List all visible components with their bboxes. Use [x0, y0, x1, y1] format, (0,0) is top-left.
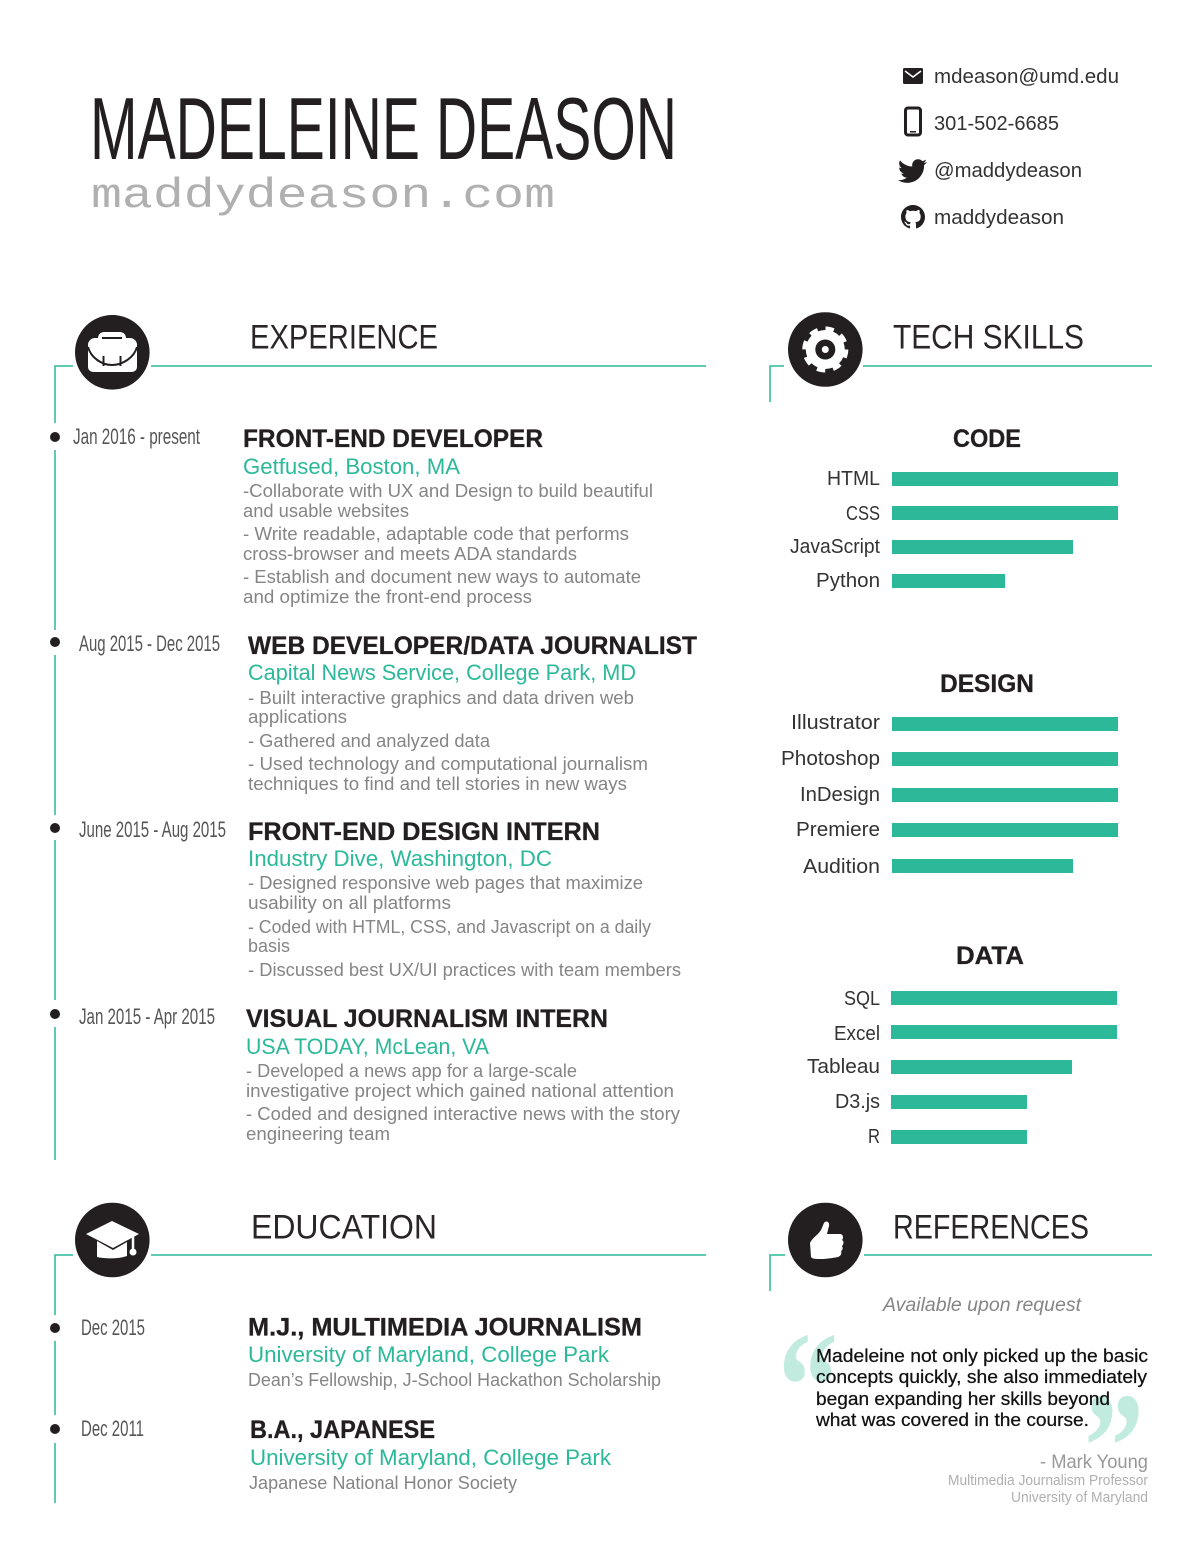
job: web developer/data journalist — [79, 631, 697, 794]
job: front-end developer: and optimize the front-end process — [243, 586, 532, 607]
testimonial quote: began expanding her skills beyond — [816, 1388, 1110, 1409]
bar chart: design: InDesign — [800, 784, 880, 806]
job: visual journalism intern: VISUAL JOURNALISM INTERN — [246, 1005, 608, 1033]
heading: experience: EXPERIENCE — [250, 318, 438, 356]
github handle: maddydeason — [934, 207, 1064, 229]
icon: github — [901, 205, 925, 228]
job: front-end developer: - Write readable, adaptable code that performs — [243, 523, 629, 544]
bar chart: data: Excel — [834, 1023, 880, 1045]
testimonial quote — [815, 1345, 1148, 1430]
attribution: University of Maryland — [1011, 1490, 1148, 1506]
bar chart: code — [790, 425, 1118, 592]
bar chart: design: Premiere — [796, 819, 880, 841]
website: maddydeason.com — [91, 172, 555, 220]
job: front-end developer: -Collaborate with UX and Design to build beautiful — [243, 480, 653, 501]
panel: tech skills — [770, 312, 1152, 1148]
job: web developer/data journalist: applications — [248, 706, 347, 727]
twitter handle: @maddydeason — [934, 160, 1082, 182]
heading: tech skills: TECH SKILLS — [893, 318, 1084, 356]
job: front-end developer: Getfused, Boston, MA — [243, 454, 460, 479]
attribution — [948, 1451, 1148, 1506]
bar chart: code: HTML — [827, 468, 880, 490]
degree: B.A. — [81, 1416, 612, 1493]
job: front-end design intern: usability on all platforms — [248, 892, 451, 913]
icon: mail — [903, 68, 923, 84]
job: web developer/data journalist: - Used technology and computational journalism — [248, 753, 648, 774]
bar chart: design — [781, 670, 1118, 878]
icon: graduation cap — [75, 1203, 150, 1277]
bar chart: code: CSS — [846, 503, 880, 525]
icon: phone — [906, 108, 920, 135]
title: name: MADELEINE DEASON — [90, 79, 677, 178]
bar chart: data: DATA — [956, 942, 1024, 970]
bar chart: design: Audition — [803, 856, 880, 878]
job: visual journalism intern: Jan 2015 - Apr 2015 — [79, 1004, 215, 1029]
contact list — [898, 66, 1119, 229]
panel: references — [770, 1203, 1152, 1533]
bar chart: design: DESIGN — [940, 670, 1034, 698]
bar chart: data — [807, 942, 1117, 1148]
bar chart: data: R — [868, 1126, 880, 1148]
job: web developer/data journalist: Aug 2015 - Dec 2015 — [79, 631, 220, 656]
job: web developer/data journalist: - Built interactive graphics and data driven web — [248, 687, 634, 708]
job: front-end design intern: June 2015 - Aug 2015 — [79, 817, 226, 842]
testimonial quote: what was covered in the course. — [815, 1409, 1089, 1430]
icon: gear — [788, 312, 863, 387]
job: front-end design intern: Industry Dive, Washington, DC — [248, 846, 552, 871]
note: available upon request: Available upon request — [882, 1294, 1083, 1316]
degree: M.J.: Dean’s Fellowship, J-School Hackathon Scholarship — [248, 1369, 661, 1390]
timeline dots — [50, 432, 60, 1019]
degree: B.A.: B.A., JAPANESE — [250, 1416, 435, 1444]
job: visual journalism intern — [79, 1004, 681, 1144]
job: visual journalism intern: investigative project which gained national attention — [246, 1080, 674, 1101]
degree: M.J. — [81, 1314, 661, 1390]
job: front-end developer: Jan 2016 - present — [73, 424, 200, 449]
job: front-end developer: and usable websites — [243, 500, 409, 521]
decorative quote close: ” — [1084, 1361, 1144, 1533]
job: visual journalism intern: - Developed a news app for a large-scale — [246, 1060, 577, 1081]
degree: B.A.: Dec 2011 — [81, 1416, 144, 1441]
icon: briefcase — [75, 315, 150, 390]
attribution: Multimedia Journalism Professor — [948, 1473, 1148, 1489]
job: front-end developer — [73, 424, 653, 607]
bar chart: data: D3.js — [835, 1091, 880, 1113]
panel: education — [50, 1203, 706, 1503]
phone number: 301-502-6685 — [934, 113, 1059, 135]
job: front-end design intern: - Designed responsive web pages that maximize — [248, 872, 643, 893]
header: name and website — [90, 79, 677, 220]
job: front-end design intern — [79, 817, 681, 980]
email: mdeason@umd.edu — [934, 66, 1119, 88]
heading: references: REFERENCES — [893, 1208, 1089, 1246]
job: web developer/data journalist: techniques to find and tell stories in new ways — [248, 773, 627, 794]
icon: thumbs up — [788, 1203, 863, 1277]
job: front-end design intern: basis — [248, 935, 290, 956]
job: front-end developer: - Establish and document new ways to automate — [243, 566, 641, 587]
decorative quote open: “ — [778, 1300, 838, 1472]
panel: experience — [50, 315, 706, 1160]
job: visual journalism intern: - Coded and designed interactive news with the story — [246, 1103, 681, 1124]
bar chart: code: CODE — [953, 425, 1021, 453]
timeline dots — [50, 1323, 60, 1434]
job: front-end developer: cross-browser and meets ADA standards — [243, 543, 577, 564]
degree: M.J.: University of Maryland, College Park — [248, 1342, 610, 1367]
job: visual journalism intern: USA TODAY, McLean, VA — [246, 1034, 489, 1059]
degree: M.J.: Dec 2015 — [81, 1315, 145, 1340]
bar chart: data: Tableau — [807, 1056, 880, 1078]
degree: M.J.: M.J., MULTIMEDIA JOURNALISM — [248, 1314, 642, 1342]
bar chart: code: JavaScript — [790, 536, 880, 558]
icon: twitter — [898, 159, 927, 183]
degree: B.A.: University of Maryland, College Park — [250, 1445, 612, 1470]
bar chart: design: Illustrator — [791, 712, 880, 734]
job: front-end design intern: FRONT-END DESIGN INTERN — [248, 818, 600, 846]
job: web developer/data journalist: - Gathered and analyzed data — [248, 730, 491, 751]
job: front-end developer: FRONT-END DEVELOPER — [243, 425, 543, 453]
heading: education: EDUCATION — [251, 1208, 437, 1246]
degree: B.A.: Japanese National Honor Society — [249, 1472, 518, 1493]
job: visual journalism intern: engineering team — [246, 1123, 390, 1144]
attribution: - Mark Young — [1040, 1451, 1148, 1473]
job: front-end design intern: - Coded with HTML, CSS, and Javascript on a daily — [248, 916, 652, 937]
testimonial quote: Madeleine not only picked up the basic — [816, 1345, 1148, 1366]
bar chart: code: Python — [816, 570, 880, 592]
bar chart: design: Photoshop — [781, 748, 880, 770]
job: web developer/data journalist: Capital News Service, College Park, MD — [248, 660, 636, 685]
testimonial quote: concepts quickly, she also immediately — [816, 1366, 1148, 1387]
job: web developer/data journalist: WEB DEVELOPER/DATA JOURNALIST — [248, 632, 697, 660]
bar chart: data: SQL — [844, 988, 880, 1010]
job: front-end design intern: - Discussed best UX/UI practices with team members — [248, 959, 681, 980]
